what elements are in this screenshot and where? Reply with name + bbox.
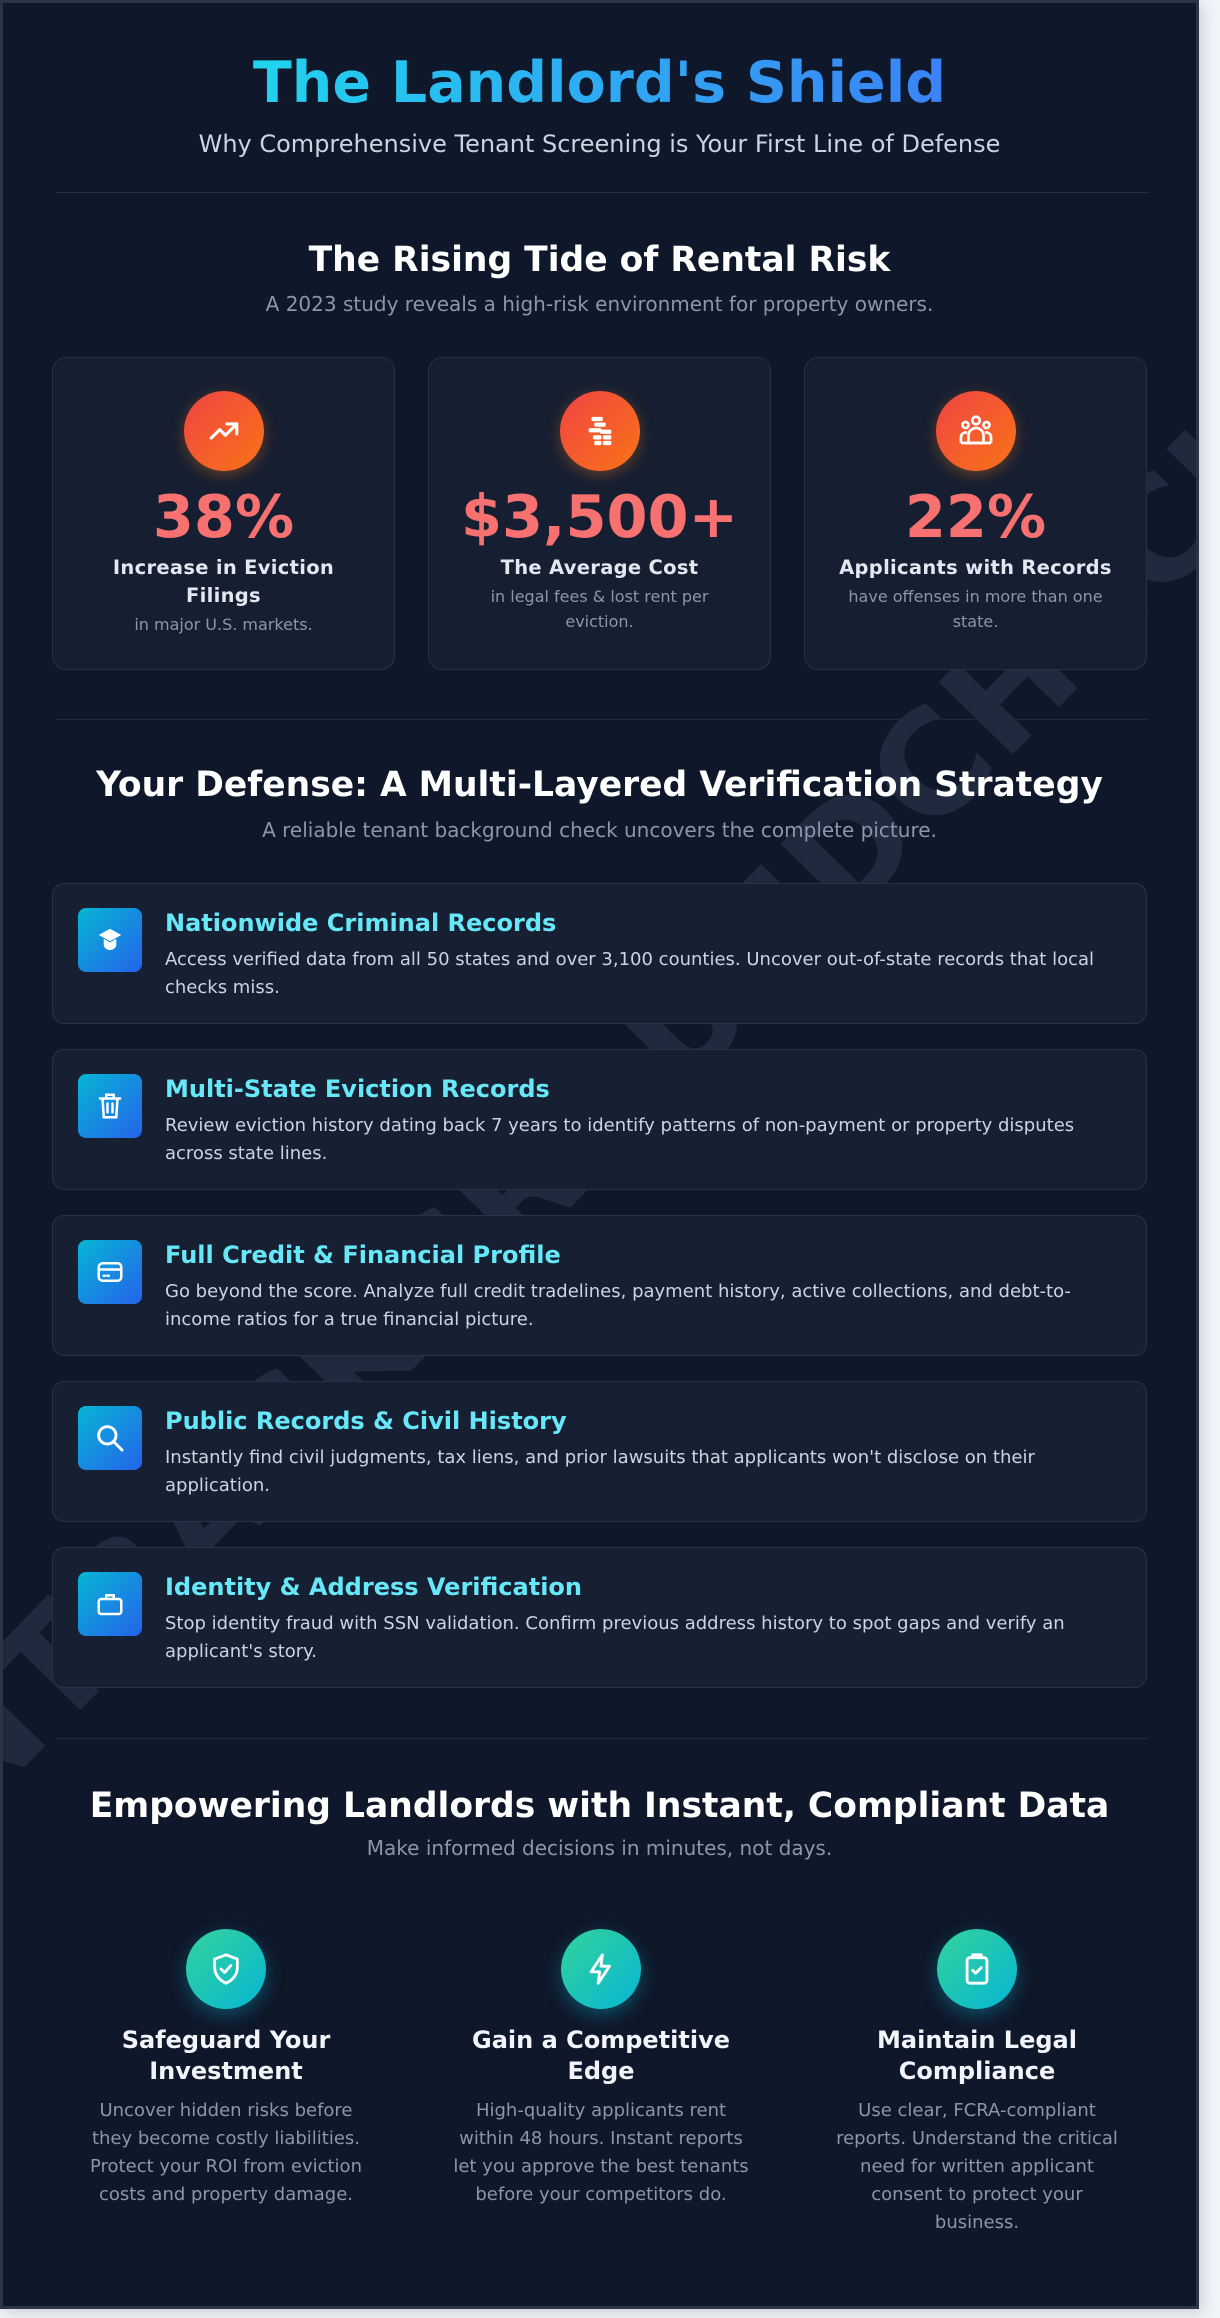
feature: eviction [52, 1049, 1147, 1190]
label [839, 556, 1112, 631]
icon: trash [78, 1074, 142, 1138]
description: Go beyond the score. Analyze full credit tradelines, payment history, active collections, and debt-to-income ratios for a true financial picture. [165, 1281, 1071, 1330]
description: High-quality applicants rent within 48 hours. Instant reports let you approve the best tenants before your competitors do. [453, 2100, 749, 2205]
description: Review eviction history dating back 7 years to identify patterns of non-payment or property disputes across state lines. [165, 1115, 1074, 1164]
label: The Average Cost [501, 556, 698, 579]
title: Public Records & Civil History [165, 1407, 567, 1435]
feature: public records [52, 1381, 1147, 1522]
title [122, 2026, 330, 2085]
title: Maintain Legal [877, 2026, 1077, 2054]
feature: identity [52, 1547, 1147, 1688]
feature: credit [52, 1215, 1147, 1356]
title: The Landlord's Shield [253, 50, 946, 116]
stat card: 38% [52, 357, 395, 670]
icon: card [78, 1240, 142, 1304]
description: Stop identity fraud with SSN validation. Confirm previous address history to spot gaps and verify an applicant's story. [165, 1613, 1065, 1662]
subheading: study: A 2023 study reveals a high-risk environment for property owners. [266, 292, 933, 316]
label: in legal fees & lost rent per eviction. [491, 587, 708, 631]
title: Compliance [899, 2057, 1055, 2085]
icon: clipboard check [937, 1929, 1017, 2009]
label: Applicants with Records [839, 556, 1112, 579]
description: Access verified data from all 50 states and over 3,100 counties. Uncover out-of-state records that local checks miss. [165, 949, 1094, 998]
benefit: safeguard [90, 1927, 362, 2205]
number: 38% [153, 482, 294, 551]
title: Safeguard Your [122, 2026, 330, 2054]
title: Identity & Address Verification [165, 1573, 582, 1601]
icon: trending up [184, 391, 264, 471]
feature: criminal [52, 883, 1147, 1024]
stat card: cost [428, 357, 771, 670]
title [472, 2026, 730, 2085]
title [877, 2026, 1077, 2085]
heading: empowering: Empowering Landlords with Instant, Compliant Data [90, 1786, 1109, 1826]
benefit: compliance [836, 1927, 1118, 2233]
icon: search [78, 1406, 142, 1470]
title: Investment [149, 2057, 303, 2085]
title: Multi-State Eviction Records [165, 1075, 550, 1103]
heading: defense: Your Defense: A Multi-Layered Verification Strategy [96, 765, 1103, 805]
icon: people [936, 391, 1016, 471]
description: Instantly find civil judgments, tax liens, and prior lawsuits that applicants won't disclose on their application. [165, 1447, 1035, 1496]
subtitle: Why Comprehensive Tenant Screening is Your First Line of Defense [199, 130, 1000, 158]
subheading: Make informed decisions in minutes, not days. [367, 1836, 832, 1860]
title: Edge [567, 2057, 635, 2085]
label: in major U.S. markets. [134, 615, 313, 634]
heading: rising tide: The Rising Tide of Rental Risk [309, 240, 890, 280]
icon: bolt [561, 1929, 641, 2009]
title: Gain a Competitive [472, 2026, 730, 2054]
label: Increase in Eviction Filings [113, 556, 334, 607]
icon: shield [186, 1929, 266, 2009]
icon: coins [560, 391, 640, 471]
title: Full Credit & Financial Profile [165, 1241, 561, 1269]
label [113, 556, 334, 634]
label: have offenses in more than one state. [848, 587, 1103, 631]
description: Use clear, FCRA-compliant reports. Understand the critical need for written applicant consent to protect your business. [836, 2100, 1118, 2233]
icon: badge [78, 908, 142, 972]
stat card: 22% [804, 357, 1147, 670]
number: $3,500+ [461, 482, 738, 551]
label [491, 556, 708, 631]
icon: briefcase [78, 1572, 142, 1636]
number: 22% [905, 482, 1046, 551]
description: Uncover hidden risks before they become costly liabilities. Protect your ROI from eviction costs and property damage. [90, 2100, 362, 2205]
subheading: A reliable tenant background check uncovers the complete picture. [262, 818, 937, 842]
benefit: competitive edge [453, 1927, 749, 2205]
title: Nationwide Criminal Records [165, 909, 556, 937]
